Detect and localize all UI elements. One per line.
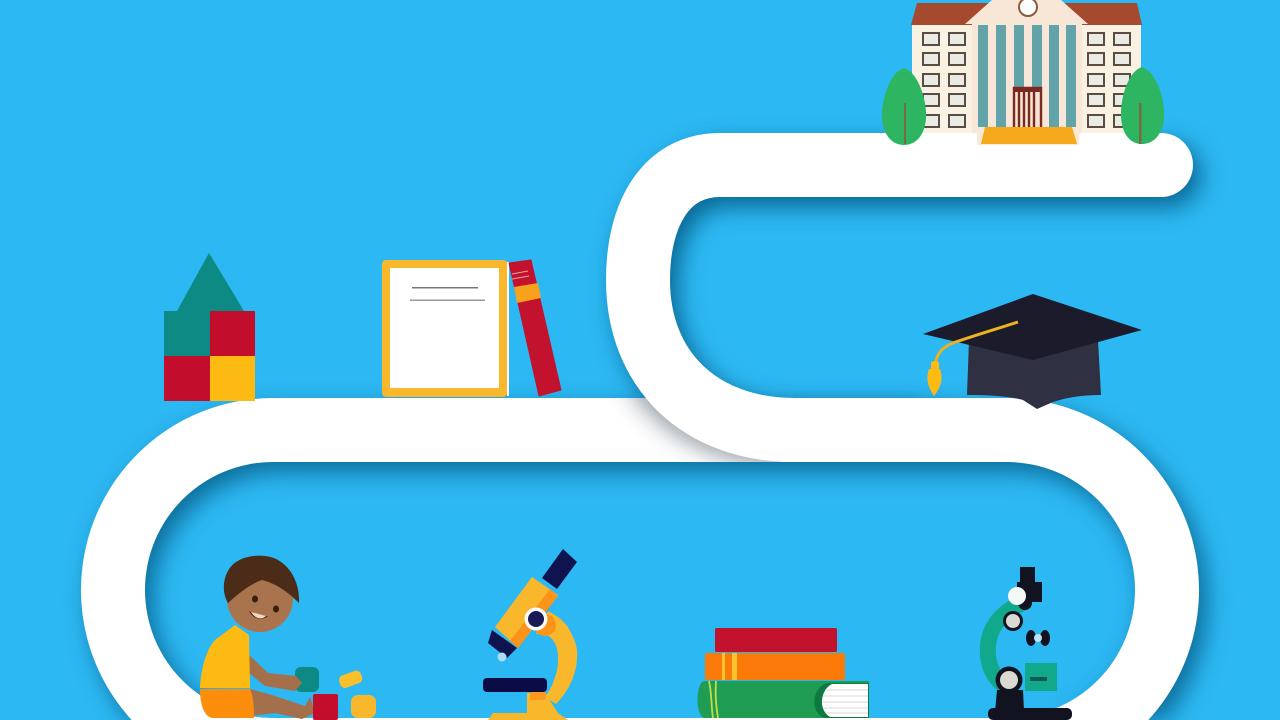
lower winding path <box>81 398 1199 720</box>
icon: toy blocks <box>164 253 255 401</box>
icon: left tree <box>882 68 926 145</box>
icon: leaning red book <box>509 260 561 396</box>
icon: notebook <box>382 260 509 397</box>
icon: stack of books <box>698 628 869 718</box>
icon: graduation cap <box>923 294 1142 409</box>
path overlap shadow <box>617 398 784 462</box>
lower winding path shadow <box>89 408 1207 720</box>
icon: yellow microscope <box>483 549 577 720</box>
icon: teal microscope <box>988 567 1072 720</box>
lower path top band repaint <box>280 398 1007 462</box>
icon: university building <box>911 0 1142 145</box>
upper path rounded end <box>1129 133 1193 197</box>
icon: right tree <box>1121 67 1164 144</box>
upper winding path shadow on blue <box>638 165 1161 430</box>
icon: child playing <box>200 556 376 720</box>
upper winding path <box>638 165 1161 430</box>
